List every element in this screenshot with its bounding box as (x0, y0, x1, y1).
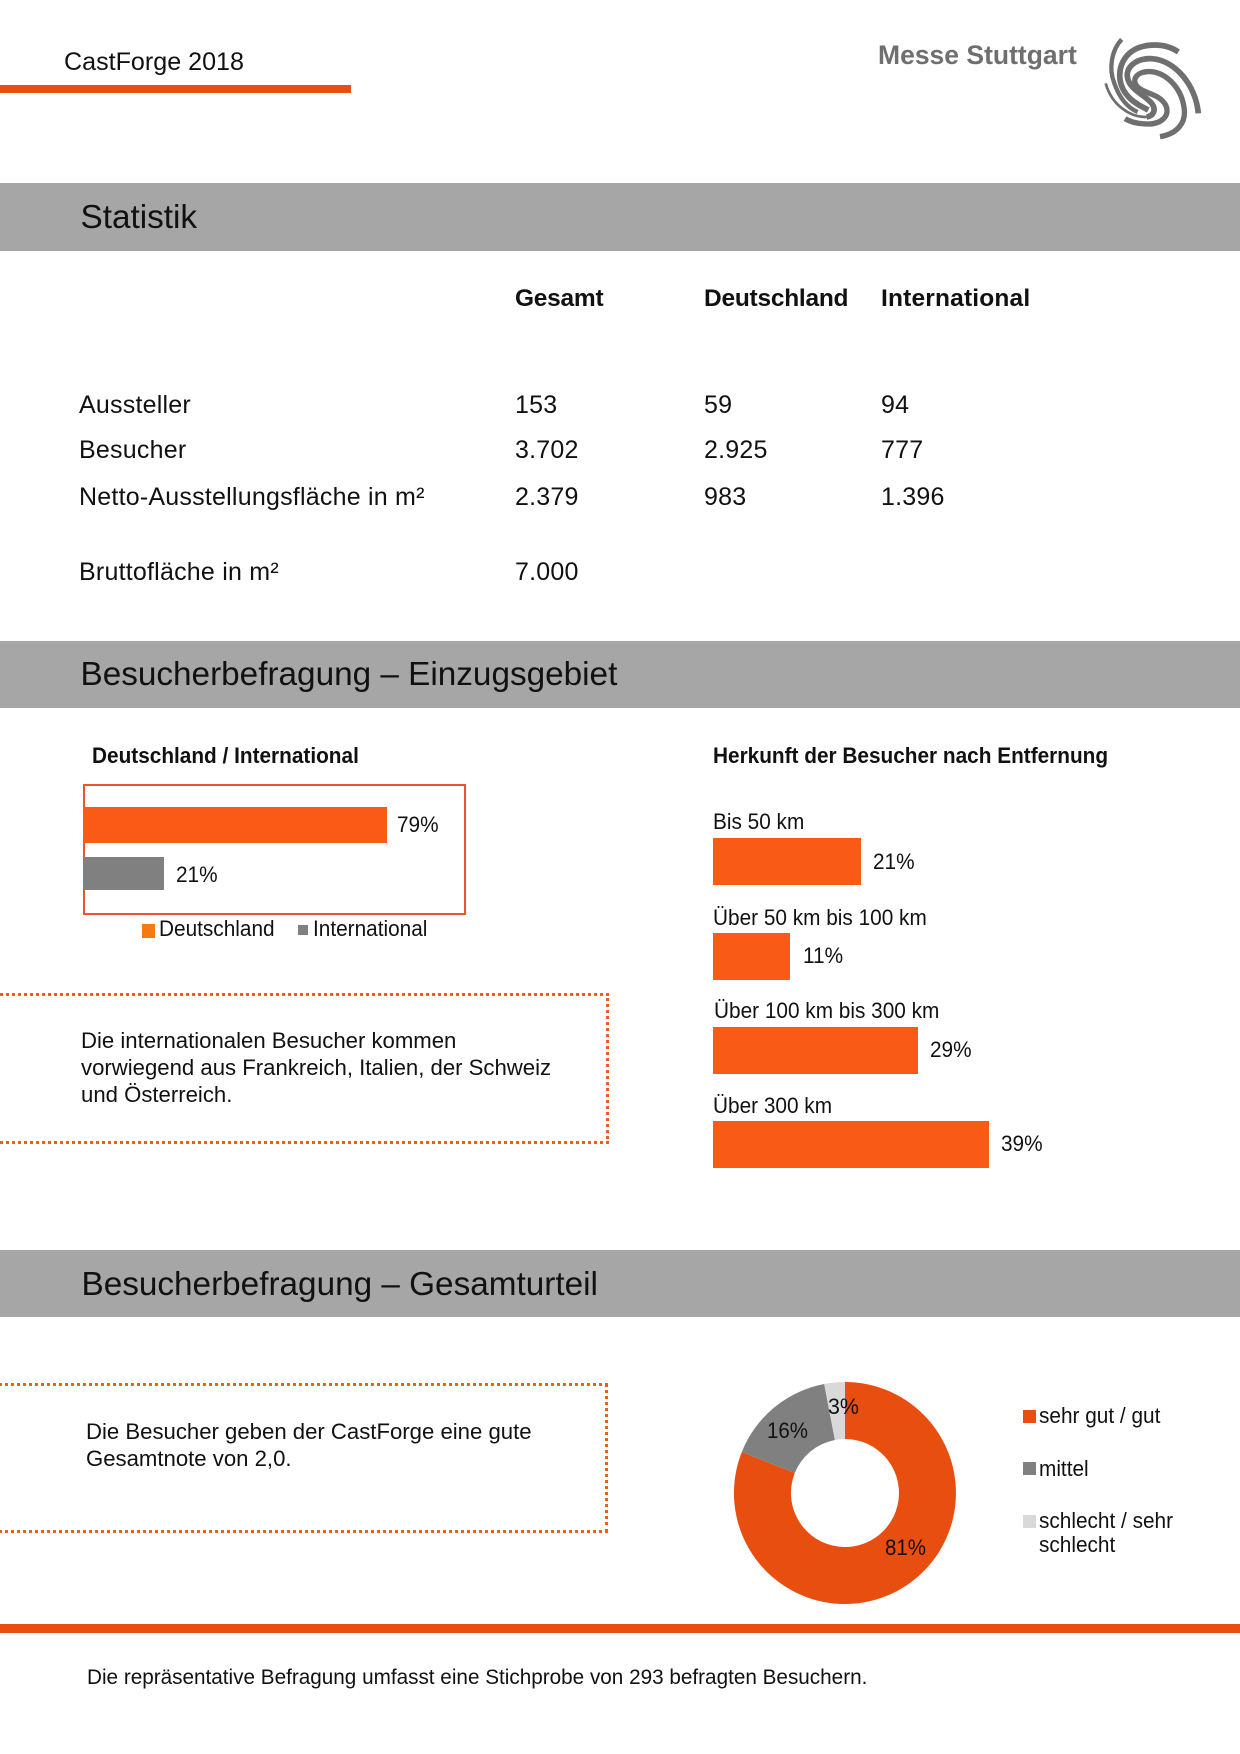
row: Aussteller (79, 391, 909, 419)
header orange rule (0, 85, 351, 93)
bar: 11% (712, 933, 790, 980)
callout text: Gesamtnote (86, 1419, 532, 1471)
callout text: internationale Besucher: vorwiegend aus Frankreich, Italien, der Schweiz (81, 1054, 551, 1080)
row: Netto-Ausstellungsfläche: 1.396 (881, 483, 945, 511)
donut chart: Gesamturteil (734, 1382, 956, 1604)
row: Bruttofläche: Bruttofläche in m² (79, 558, 279, 586)
heading: Einzugsgebiet: Besucherbefragung – Einzugsgebiet (80, 656, 617, 693)
row: Besucher: 2.925 (704, 436, 768, 464)
row: Netto-Ausstellungsfläche: 2.379 (515, 483, 579, 511)
row: Bruttofläche (79, 558, 579, 586)
legend label: schlecht / sehr schlecht (1039, 1508, 1173, 1557)
row: Netto-Ausstellungsfläche: 983 (704, 483, 746, 511)
footer orange rule (0, 1624, 1240, 1633)
legend: Deutschland / International (142, 916, 427, 941)
icon: Messe Stuttgart spiral logo (1104, 38, 1202, 140)
chart title: Deutschland / International: Deutschland / International (92, 743, 359, 768)
bar: International 21% (84, 857, 164, 890)
legend swatch: mittel (1023, 1462, 1036, 1475)
section band: Gesamturteil (0, 1250, 1240, 1317)
column header: International: International (881, 285, 1030, 312)
donut chart: Gesamturteil: 81% (885, 1535, 926, 1560)
column header: Deutschland: Deutschland (704, 285, 848, 312)
legend label: sehr gut / gut: sehr gut / gut (1039, 1403, 1160, 1428)
label: Bis 50 km: Bis 50 km (712, 809, 804, 834)
row: Besucher: 3.702 (515, 436, 579, 464)
donut chart: Gesamturteil: 3% (828, 1394, 859, 1419)
value: 11%: 11% (802, 943, 843, 968)
value: 21%: 21% (176, 862, 218, 887)
bar: Deutschland 79% (83, 807, 387, 843)
callout: internationale Besucher (0, 993, 609, 1144)
row: Netto-Ausstellungsfläche (79, 483, 945, 511)
label: Über 100 km bis 300 km: Über 100 km bis 300 km (714, 998, 939, 1023)
legend label: Deutschland: Deutschland (159, 916, 275, 941)
legend label: schlecht / sehr schlecht: schlecht / sehr (1039, 1508, 1173, 1533)
row: Aussteller: 59 (704, 391, 732, 419)
chart title: Herkunft: Herkunft der Besucher nach Entfernung (713, 743, 1108, 768)
value: 39%: 39% (1000, 1131, 1042, 1156)
column header: Gesamt: Gesamt (515, 285, 603, 312)
value: 21%: 21% (872, 849, 914, 874)
row: Netto-Ausstellungsfläche: Netto-Ausstellungsfläche in m² (79, 483, 425, 511)
row: Aussteller: Aussteller (79, 391, 191, 419)
section band: Einzugsgebiet (0, 641, 1240, 708)
legend swatch: Deutschland (142, 924, 155, 938)
callout: Gesamtnote (0, 1383, 608, 1533)
row: Aussteller: 153 (515, 391, 557, 419)
row: Besucher (79, 436, 923, 464)
callout text: internationale Besucher: und Österreich. (81, 1082, 232, 1106)
bar: 29% (712, 1027, 918, 1074)
legend swatch: International (298, 925, 308, 935)
row: Aussteller: 94 (881, 391, 909, 419)
callout text: Gesamtnote: Die Besucher geben der CastForge eine gute (86, 1419, 532, 1444)
bar chart: Herkunft nach Entfernung (712, 809, 1042, 1168)
donut legend (1023, 1403, 1173, 1557)
row: Bruttofläche: 7.000 (515, 558, 579, 586)
legend label: International: International (313, 916, 427, 941)
label: Über 50 km bis 100 km: Über 50 km bis 100 km (712, 905, 926, 930)
header title: CastForge 2018 (64, 48, 244, 76)
logo wordmark: Messe Stuttgart (878, 40, 1077, 70)
legend swatch: sehr gut / gut (1023, 1410, 1036, 1423)
callout text: Gesamtnote: Gesamtnote von 2,0. (86, 1446, 292, 1471)
callout text: internationale Besucher: Die internationalen Besucher kommen (81, 1028, 456, 1052)
statistics table (79, 285, 1030, 586)
bar chart: Deutschland / International (83, 784, 466, 915)
value: 29%: 29% (930, 1037, 971, 1062)
callout text: internationale Besucher (81, 1028, 551, 1106)
row: Besucher: 777 (881, 436, 923, 464)
donut chart: Gesamturteil: 16% (767, 1418, 808, 1443)
heading: Gesamturteil: Besucherbefragung – Gesamturteil (82, 1266, 598, 1302)
legend label: mittel: mittel (1039, 1456, 1089, 1481)
label: Über 300 km: Über 300 km (712, 1093, 832, 1118)
row: Besucher: Besucher (79, 436, 186, 464)
bar: 21% (712, 838, 860, 885)
bar: 39% (712, 1121, 988, 1168)
heading: Statistik: Statistik (80, 198, 197, 236)
value: 79%: 79% (397, 812, 439, 837)
footer note: Die repräsentative Befragung umfasst eine Stichprobe von 293 befragten Besuchern. (87, 1664, 867, 1688)
legend label: schlecht / sehr schlecht: schlecht (1039, 1532, 1115, 1557)
legend swatch: schlecht / sehr schlecht (1023, 1515, 1036, 1528)
section band: Statistik (0, 183, 1240, 251)
